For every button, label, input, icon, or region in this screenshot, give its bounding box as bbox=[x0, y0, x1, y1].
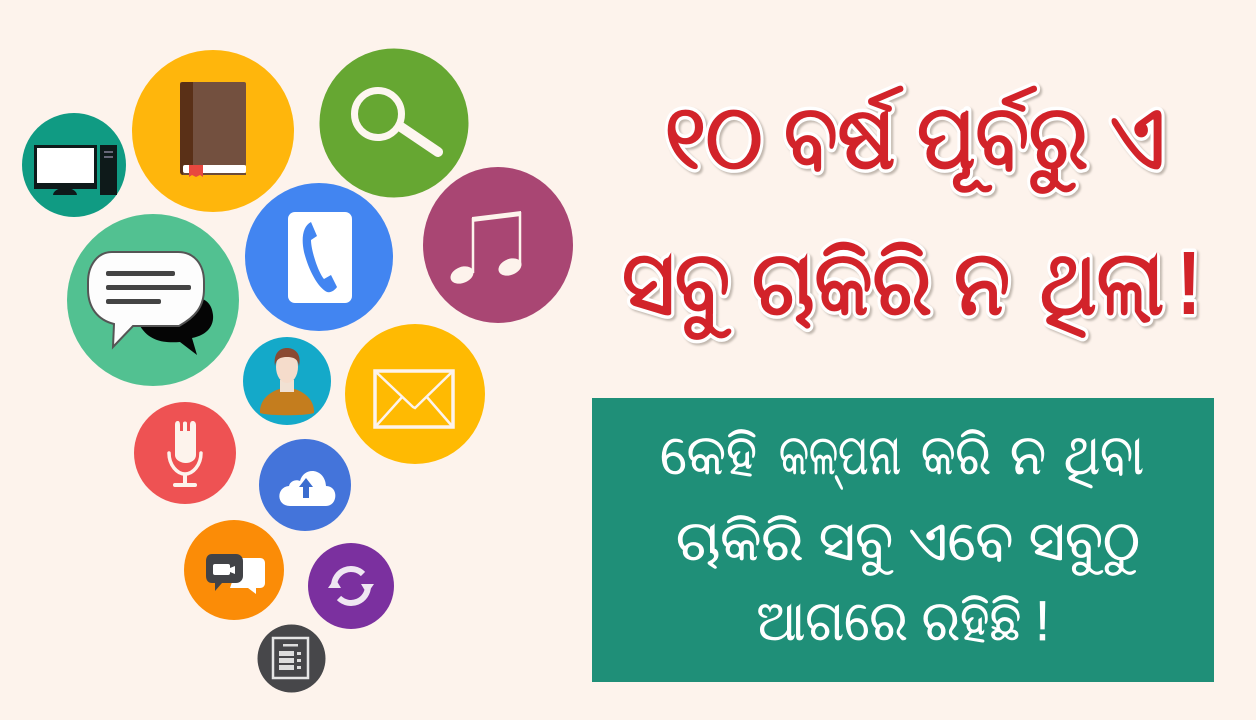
icon: chat bubbles bbox=[67, 214, 239, 386]
subtitle line 1: ନ bbox=[1010, 423, 1046, 486]
icon: book bbox=[132, 50, 294, 212]
icon: cloud upload bbox=[259, 439, 351, 531]
subtitle line 3: ଆଗରେ ରହିଛି ! bbox=[756, 589, 1050, 652]
icon: sync bbox=[308, 543, 394, 629]
icon: music note bbox=[423, 167, 573, 323]
icon: calculator document bbox=[258, 624, 326, 692]
title line 1: ୧୦ ବର୍ଷ ପୂର୍ବରୁ ଏ bbox=[665, 84, 1165, 195]
icon: video chat bbox=[184, 520, 284, 620]
title bbox=[622, 84, 1201, 341]
title line 2: ! bbox=[1177, 234, 1201, 334]
icon: envelope bbox=[345, 324, 485, 464]
icon: magnifier bbox=[320, 48, 468, 198]
subtitle line 1: ଥିବା bbox=[1064, 423, 1144, 488]
title line 2: ସବୁ bbox=[622, 234, 732, 341]
title line 2: ଥିଲା bbox=[1040, 234, 1164, 339]
subtitle line 1 bbox=[660, 423, 1144, 489]
icon: microphone bbox=[134, 402, 236, 504]
subtitle line 1: କେହି bbox=[660, 423, 757, 486]
icon: phone bbox=[245, 183, 393, 331]
panel: subtitle bbox=[592, 398, 1214, 682]
icon: computer bbox=[22, 113, 126, 217]
subtitle line 1: କଳ୍ପନା bbox=[779, 423, 901, 489]
title line 2: ଚାକିରି bbox=[752, 234, 932, 334]
subtitle line 1: କରି bbox=[921, 423, 991, 486]
subtitle line 2: ଚାକିରି ସବୁ ଏବେ ସବୁଠୁ bbox=[676, 509, 1140, 575]
title line 2 bbox=[622, 234, 1201, 341]
title line 2: ନ bbox=[954, 234, 1010, 334]
icon: person bbox=[243, 337, 331, 425]
